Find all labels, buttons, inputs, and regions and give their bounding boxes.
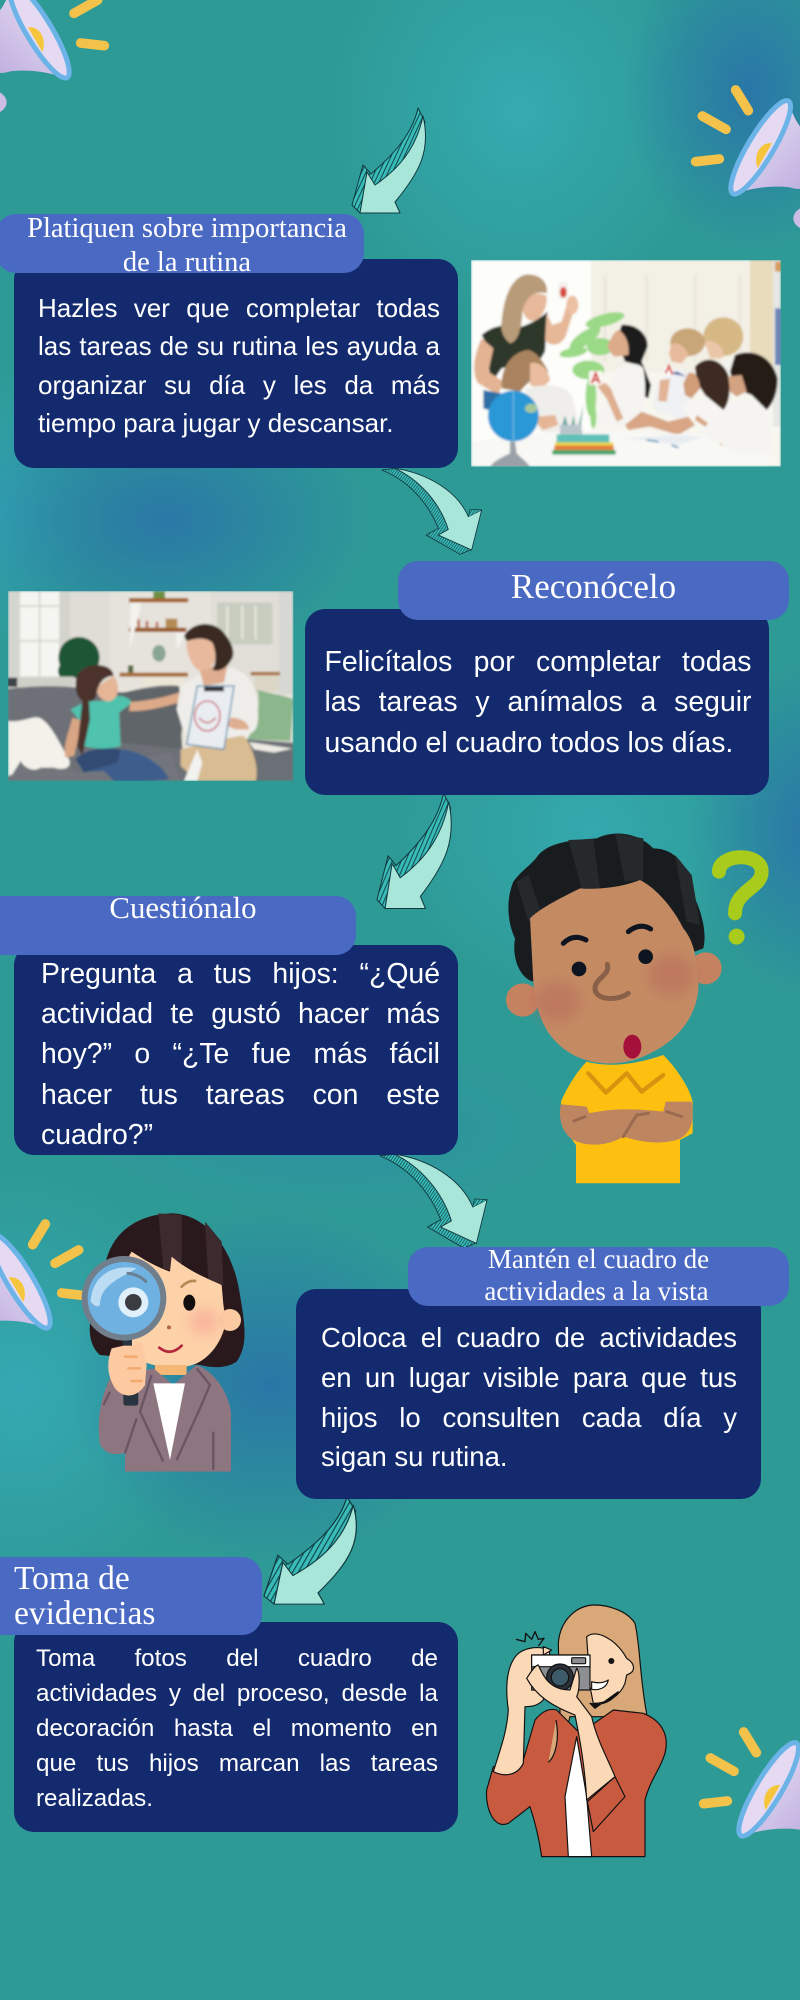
panel: Platiquen sobre importancia de la rutina [14, 259, 458, 468]
body text [41, 958, 440, 1151]
heading: Mantén el cuadro de actividades a la vista [408, 1247, 789, 1306]
heading: Toma de evidencias: evidencias [14, 1595, 155, 1632]
illustration: woman taking a photo [486, 1605, 666, 1857]
icon: megaphone bottom right [704, 1732, 800, 1873]
body text: Felicítalos por completar todas [324, 646, 752, 678]
body text [36, 1644, 438, 1812]
body text: usando el cuadro todos los días. [324, 726, 733, 758]
heading: Reconócelo [398, 561, 789, 620]
heading: Toma de evidencias: Toma de [14, 1560, 130, 1597]
heading: Mantén el cuadro de actividades a la vista: actividades a la vista [484, 1276, 709, 1306]
body text [321, 1322, 737, 1472]
panel: Reconócelo [305, 609, 769, 795]
body text: hacer tus tareas con este [41, 1079, 440, 1111]
child 3 and 4 [703, 317, 743, 356]
heading: Cuestiónalo [0, 896, 356, 955]
heading: Platiquen sobre importancia de la rutina: Platiquen sobre importancia [27, 213, 347, 244]
body text: Toma fotos del cuadro de [36, 1644, 438, 1672]
icon: megaphone middle left [0, 1224, 85, 1365]
teddy [8, 717, 70, 776]
arrow 1 [352, 108, 426, 213]
child 6 [730, 353, 778, 410]
heading: Platiquen sobre importancia de la rutina [0, 214, 364, 273]
panel: Cuestiónalo [14, 945, 458, 1155]
body text: Hazles ver que completar todas [38, 293, 440, 323]
icon: megaphone top right [696, 90, 800, 231]
body text [324, 646, 752, 758]
heading: Reconócelo: Reconócelo [511, 567, 676, 606]
body text: las tareas y anímalos a seguir [324, 686, 752, 718]
sofa [8, 685, 293, 781]
body text [38, 293, 440, 438]
body text: Coloca el cuadro de actividades [321, 1322, 737, 1353]
child 2 [619, 325, 651, 398]
illustration: boy with question mark [506, 833, 762, 1183]
girl [82, 749, 169, 781]
body text: las tareas de su rutina les ayuda a [38, 331, 440, 361]
body text: actividad te gustó hacer más [41, 998, 440, 1030]
body text: en un lugar visible para que tus [321, 1362, 737, 1393]
teacher [482, 312, 548, 383]
body text: actividades y del proceso, desde la [36, 1680, 438, 1706]
heading: Toma de evidencias [0, 1557, 262, 1635]
woman [177, 668, 258, 739]
arrow 5 [264, 1497, 356, 1604]
body text: hijos lo consulten cada día y [321, 1402, 737, 1432]
panel: Mantén el cuadro de actividades a la vista [296, 1289, 761, 1499]
child front left [502, 350, 548, 392]
body text: decoración hasta el momento en [36, 1714, 438, 1742]
body text: Pregunta a tus hijos: “¿Qué [41, 958, 440, 990]
icon: megaphone top left [0, 0, 104, 115]
body text: organizar su día y les da más [38, 370, 440, 400]
icon: question mark [719, 857, 762, 945]
photo: teacher with children [471, 260, 781, 467]
heading: Cuestiónalo: Cuestiónalo [109, 891, 257, 925]
arrow 2 [382, 468, 482, 554]
body text: cuadro?” [41, 1119, 153, 1151]
arrow 3 [377, 793, 451, 908]
arrow 4 [380, 1154, 487, 1248]
photo: mother with daughter and smiley board [8, 591, 293, 781]
illustration: woman with magnifying glass [85, 1213, 245, 1472]
body text: tiempo para jugar y descansar. [38, 408, 394, 438]
body text: que tus hijos marcan las tareas [36, 1750, 438, 1776]
child 5 [695, 360, 730, 410]
body text: hoy?” o “¿Te fue más fácil [41, 1038, 440, 1070]
heading: Mantén el cuadro de actividades a la vista: Mantén el cuadro de [488, 1244, 709, 1274]
body text: sigan su rutina. [321, 1441, 508, 1472]
panel: Toma de evidencias [14, 1622, 458, 1832]
body text: realizadas. [36, 1784, 153, 1812]
table and objects [674, 432, 726, 456]
